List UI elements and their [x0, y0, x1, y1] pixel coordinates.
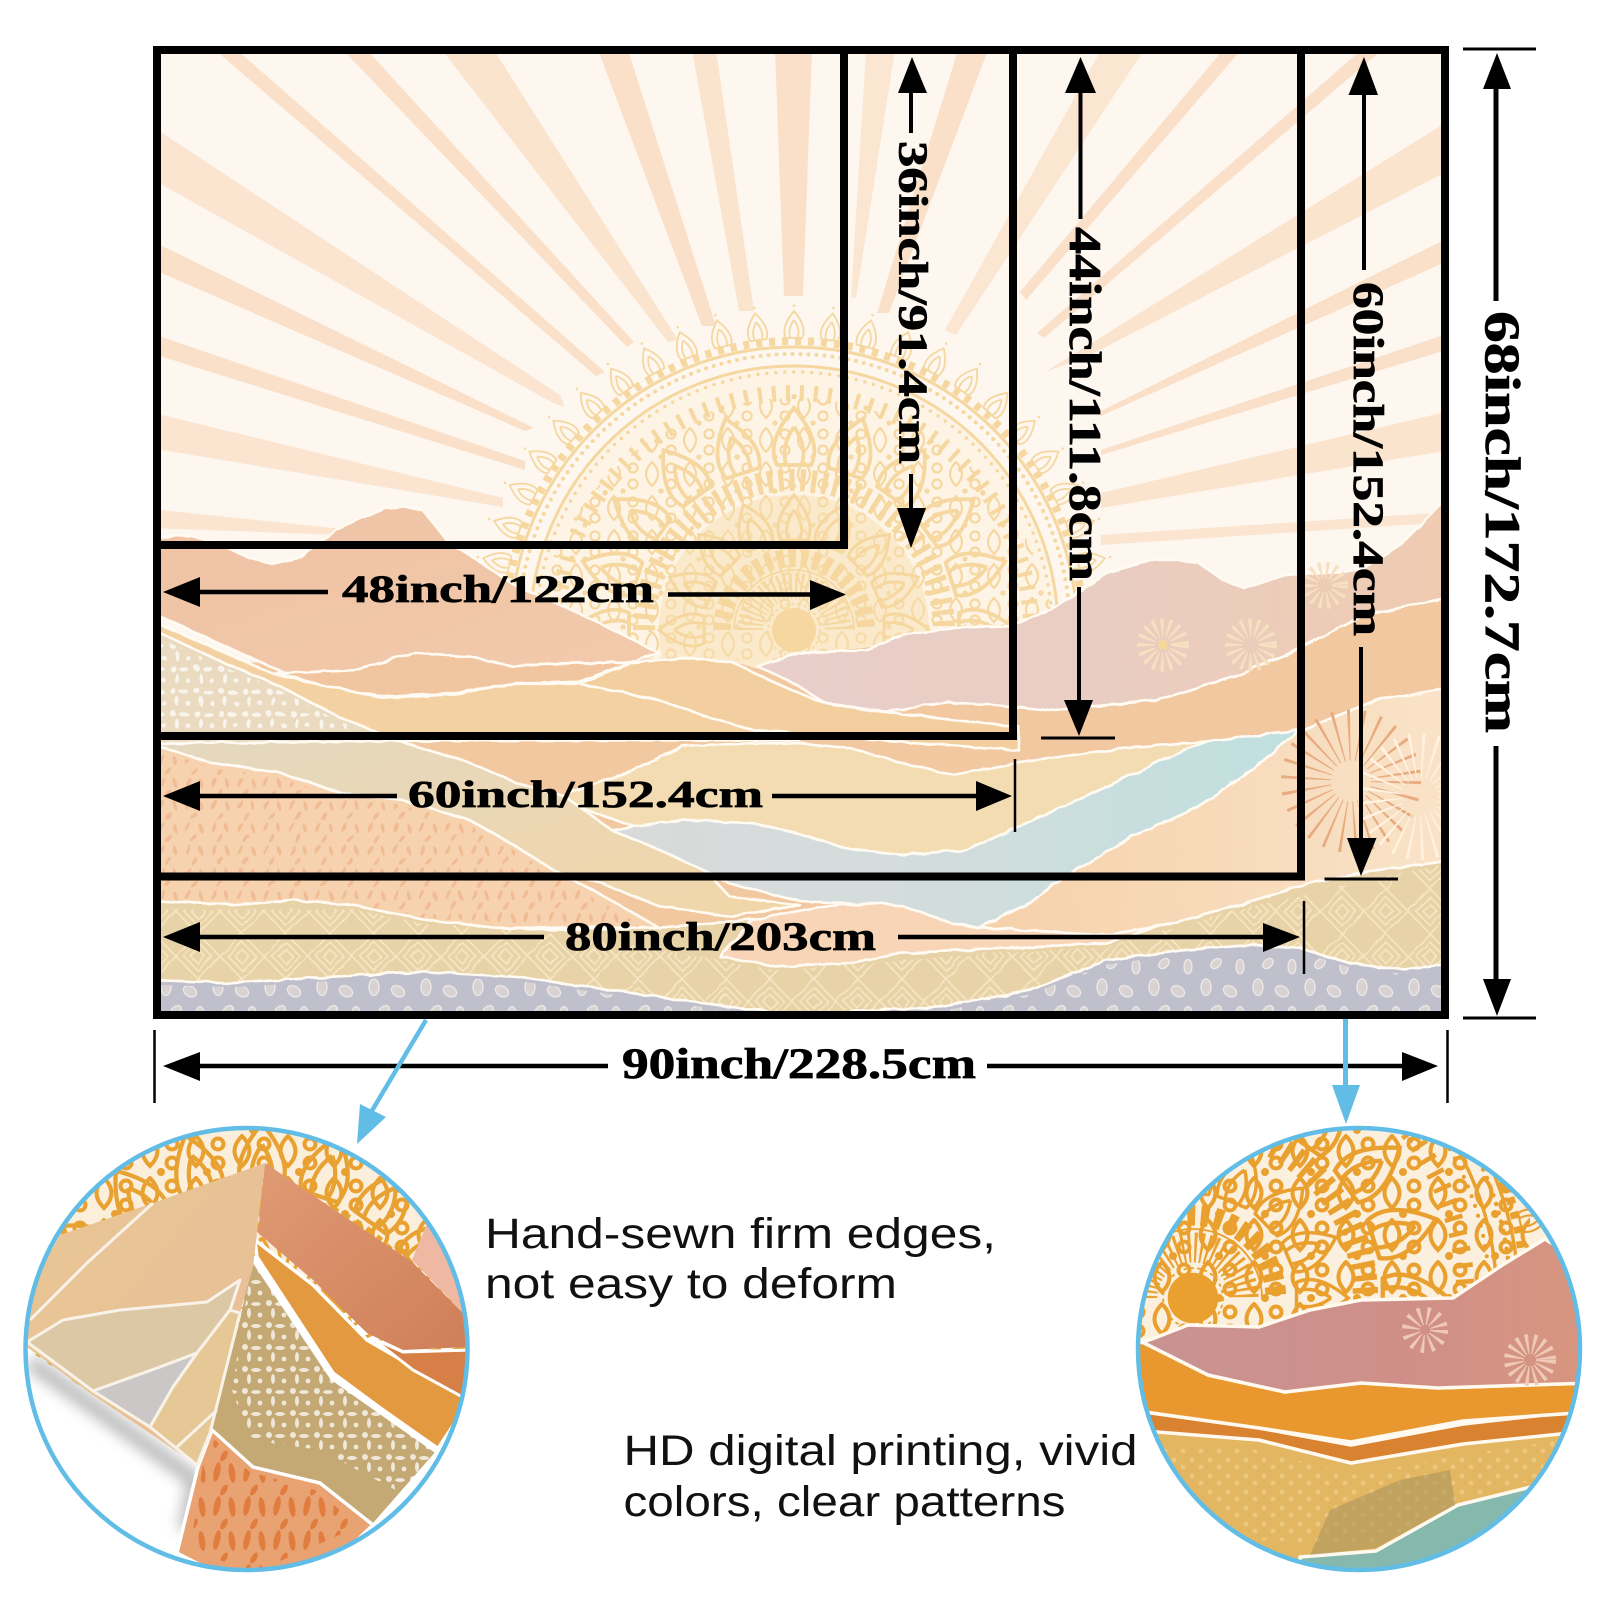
dimension 90 inch: 90inch/228.5cm	[622, 1041, 976, 1088]
darker orange band	[1130, 1410, 1590, 1463]
khaki lace panel	[212, 1257, 437, 1523]
dimension 60 inch height	[1324, 57, 1398, 879]
right orange sunburst field	[978, 688, 1450, 935]
callout arrow right	[1332, 1019, 1360, 1124]
sun rays	[150, 50, 1450, 545]
orange mandala texture	[1130, 1125, 1530, 1345]
caption: hand-sewn edges	[485, 1210, 996, 1308]
white lace print	[232, 1262, 437, 1495]
left marks texture	[161, 750, 650, 930]
circle border	[1138, 1128, 1580, 1570]
golden lower hill	[1130, 1420, 1590, 1580]
khaki speckle	[1310, 1470, 1455, 1555]
orange mandala print	[35, 1130, 466, 1386]
dimension 80 inch	[163, 901, 1304, 974]
frame 60 x 44	[157, 50, 1013, 736]
dimension 68 inch	[1463, 49, 1536, 1018]
dimension 60 inch width	[163, 759, 1015, 832]
grey to teal river	[612, 731, 1300, 927]
orange mandala texture	[64, 1130, 426, 1254]
dimension 44 inch	[1041, 57, 1115, 738]
hill layers	[1130, 1239, 1590, 1590]
white fabric backing	[28, 1354, 80, 1397]
flowers and bursts	[1146, 570, 1460, 838]
detail circle: HD print	[818, 923, 1590, 1590]
pink sliver	[412, 1224, 462, 1312]
detail circle: hand-sewn edge	[23, 1126, 470, 1572]
marks	[190, 1440, 360, 1572]
outer frame 90 x 68	[157, 50, 1445, 1015]
caption: HD printing: HD digital printing, vivid	[624, 1427, 1138, 1475]
peach wedge	[720, 903, 1157, 967]
cream backdrop	[1130, 1120, 1590, 1420]
ground	[250, 600, 1441, 927]
dimension 60 inch height: 60inch/152.4cm	[1344, 282, 1391, 636]
dimension 36 inch	[890, 57, 936, 548]
frame 80 x 60	[157, 50, 1301, 876]
grey stones left	[161, 970, 771, 1011]
lace corner texture	[161, 642, 356, 730]
frame 48 x 36	[157, 50, 844, 545]
callout arrow left	[357, 1020, 426, 1144]
dimension 36 inch: 36inch/91.4cm	[890, 141, 936, 464]
mid orange mountain	[277, 653, 631, 697]
golden hill	[579, 658, 1019, 750]
circle border	[26, 1128, 468, 1570]
landscape layers	[150, 499, 1460, 1022]
peach mountain	[150, 506, 659, 674]
dimension 60 inch width: 60inch/152.4cm	[408, 774, 763, 816]
dimension 44 inch: 44inch/111.8cm	[1060, 227, 1110, 581]
red-orange chunk	[374, 1339, 466, 1398]
cream sky	[161, 54, 1441, 662]
grey stones right	[849, 943, 1441, 1011]
tapestry artwork	[150, 45, 1460, 1022]
orange band	[1130, 1335, 1590, 1442]
dimension 48 inch	[163, 567, 846, 611]
folded flap	[24, 1163, 265, 1465]
diamond patterned tan band	[150, 860, 1450, 1022]
caption: hand-sewn edges: not easy to deform	[485, 1260, 897, 1308]
fold shadow	[30, 1362, 195, 1530]
dimension 68 inch: 68inch/172.7cm	[1475, 311, 1531, 733]
orange mandala	[818, 923, 1568, 1361]
left peach marks field	[150, 740, 659, 928]
caption: HD printing: colors, clear patterns	[624, 1478, 1066, 1526]
dimension 48 inch: 48inch/122cm	[342, 567, 654, 611]
orange marks panel	[177, 1430, 373, 1575]
white stitch line	[253, 1257, 437, 1450]
lace tan band	[150, 741, 800, 916]
mauve flowers	[1411, 1316, 1546, 1376]
dimension 80 inch: 80inch/203cm	[565, 914, 876, 959]
cream tan mountain	[560, 741, 1208, 855]
tan foreground band	[150, 620, 800, 741]
terracotta panel	[258, 1163, 470, 1350]
orange strip	[255, 1240, 470, 1450]
caption: HD printing	[624, 1427, 1138, 1526]
teal corner	[1300, 1470, 1590, 1590]
diamond pattern	[161, 864, 1441, 1011]
lace corner	[161, 632, 382, 743]
cream mandala backdrop	[50, 1130, 462, 1312]
dimension 90 inch	[154, 1030, 1448, 1103]
stone patterns	[161, 958, 1441, 1011]
hill dots texture	[1150, 1440, 1560, 1545]
mauve mountain	[1130, 1239, 1590, 1392]
caption: hand-sewn edges: Hand-sewn firm edges,	[485, 1210, 996, 1258]
mauve mountain	[756, 499, 1450, 711]
mandala sun	[476, 304, 1112, 668]
